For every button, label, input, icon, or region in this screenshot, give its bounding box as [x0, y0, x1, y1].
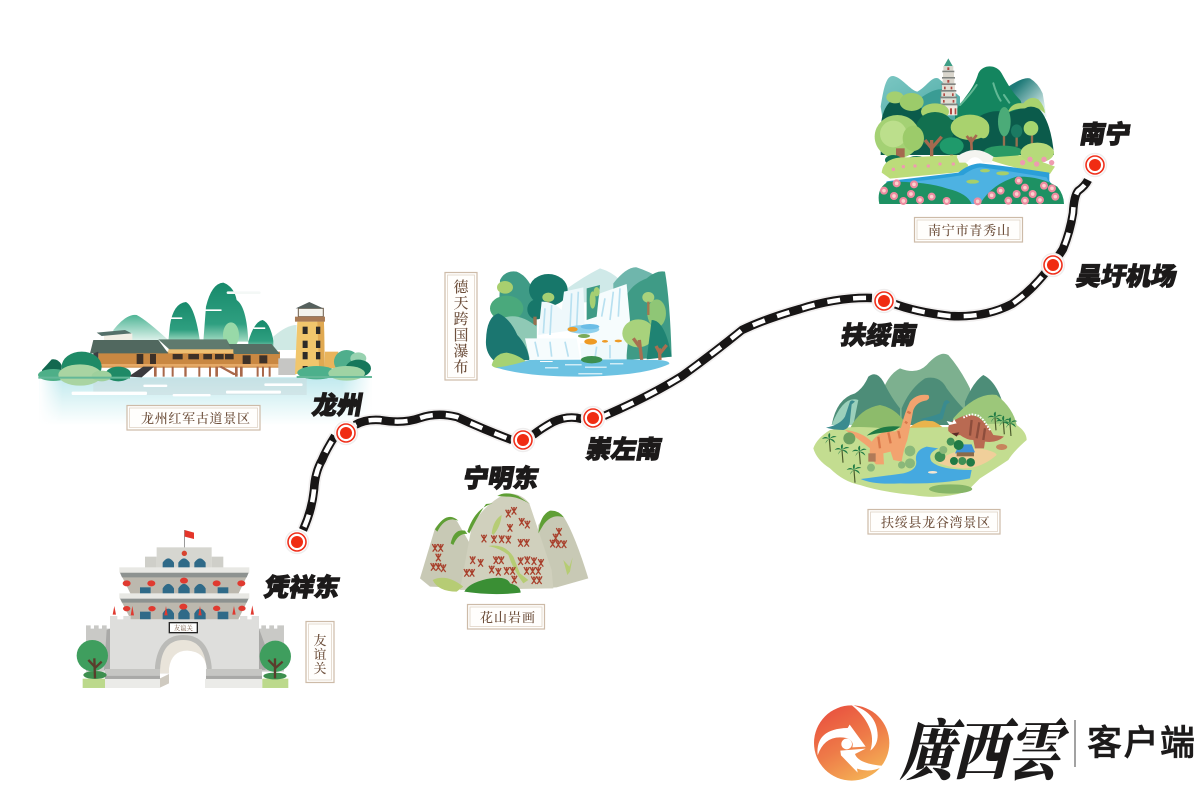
orange rocks [568, 327, 622, 345]
river [861, 447, 972, 484]
arch gate [155, 635, 212, 688]
petroglyph figures [431, 507, 567, 584]
left tree [77, 640, 108, 679]
third storey [119, 593, 249, 619]
caption: Friendship Pass vertical [306, 622, 334, 682]
illustration: Longgu Bay dinosaur park [813, 354, 1027, 497]
caption: Huashan rock paintings: 花山岩画 [480, 610, 535, 625]
back hills [498, 267, 672, 360]
label: Fusui South: 扶绥南 [839, 322, 919, 350]
left bush [492, 353, 528, 369]
ground island [813, 424, 1027, 497]
station labels [262, 120, 1179, 602]
label: Longzhou: 龙州 [310, 392, 365, 420]
caption: Detian waterfall vertical: 布 [453, 359, 469, 376]
white bridge [957, 150, 993, 163]
palm trees [822, 412, 1017, 483]
banks [882, 155, 968, 179]
label: Wuxu Airport: 吴圩机场 [1074, 263, 1179, 291]
illustration: Huashan rock paintings [420, 493, 588, 594]
boat [928, 471, 937, 474]
hut and camp [937, 444, 1007, 468]
illustration: Longzhou Red Army ancient road [38, 283, 372, 434]
caption: Detian waterfall vertical: 德 [453, 279, 469, 296]
caption: Huashan rock paintings [468, 604, 544, 629]
logo swirl emblem [814, 705, 889, 781]
caption: Nanning Qingxiu Mountain [914, 218, 1022, 242]
flag [184, 530, 194, 548]
watchtower [295, 302, 338, 374]
back hills [881, 76, 1047, 123]
illustration: Qingxiu Mountain [875, 58, 1064, 205]
caption: Longzhou Red Army road: 龙州红军古道景区 [141, 411, 250, 426]
second storey [119, 567, 249, 594]
illustration: Friendship Pass [77, 530, 291, 688]
green ridges [435, 493, 564, 545]
round trees [843, 432, 975, 472]
orange long-neck dinosaur [845, 395, 929, 464]
gray wall [278, 358, 296, 375]
bush behind orange dinosaur [867, 426, 900, 436]
green bush [464, 578, 521, 594]
station: Fusui South [872, 290, 896, 312]
caption: Fusui Longgu Bay [868, 510, 1000, 534]
plinth [83, 669, 288, 688]
plaque: 友谊关 [174, 623, 193, 632]
river [879, 163, 1064, 204]
label: Nanning: 南宁 [1078, 120, 1133, 149]
flower bushes [879, 177, 1064, 205]
caption: Detian waterfall vertical [445, 272, 477, 380]
waterfalls [525, 284, 630, 360]
station: Pingxiang East [286, 530, 308, 554]
caption: Friendship Pass vertical: 谊 [313, 647, 327, 662]
water [39, 377, 372, 434]
left dark tree [486, 313, 529, 362]
right tree [260, 641, 291, 679]
station: Wuxu Airport [1042, 254, 1064, 276]
caption: Detian waterfall vertical: 瀑 [453, 343, 469, 360]
caption: Detian waterfall vertical: 跨 [453, 311, 469, 328]
label: Ningming East: 宁明东 [461, 464, 541, 493]
meadow patch [929, 484, 972, 494]
logo calligraphy: 廣西雲 [896, 716, 1074, 788]
lime canopies [886, 91, 1045, 147]
caption: Nanning Qingxiu Mountain: 南宁市青秀山 [928, 223, 1010, 238]
station: Longzhou [334, 422, 358, 444]
caption: Friendship Pass vertical: 关 [313, 661, 327, 676]
main wall [110, 616, 259, 670]
karst mountains [832, 354, 1003, 425]
plaque [169, 623, 197, 633]
label: Pingxiang East: 凭祥东 [262, 573, 342, 602]
divider [1074, 720, 1076, 767]
pagoda [939, 58, 958, 115]
right trees [622, 292, 672, 360]
water highlights [540, 361, 623, 374]
cloud streaks [168, 291, 265, 329]
water highlights [72, 383, 303, 396]
right bushes [297, 350, 372, 381]
top storey [145, 547, 223, 569]
route line: Nanning to Pingxiang East [303, 180, 1088, 530]
side towers [86, 625, 284, 672]
rock peaks [420, 494, 588, 590]
trees [875, 107, 1038, 166]
dark forest [881, 97, 1054, 155]
stilted wooden houses [90, 339, 280, 377]
left bushes [38, 352, 131, 386]
mountains [113, 283, 297, 350]
lotus leaves [929, 169, 1009, 192]
background blue dinosaurs [826, 400, 950, 430]
station markers [286, 154, 1106, 554]
misty slope [498, 316, 537, 360]
river bush [581, 356, 602, 363]
red lanterns [113, 578, 254, 615]
illustration: Detian waterfall [486, 267, 672, 377]
station: Ningming East [512, 428, 534, 452]
caption: Fusui Longgu Bay: 扶绥县龙谷湾景区 [881, 515, 990, 530]
caption: Friendship Pass vertical: 友 [313, 633, 327, 648]
logo: Guangxi Cloud client [814, 705, 1195, 788]
right bank flowers [892, 157, 1054, 171]
label: Chongzuo South: 崇左南 [584, 436, 664, 464]
upper small house [97, 330, 132, 342]
client text: 客户端 [1087, 724, 1195, 763]
pool [496, 359, 669, 377]
stegosaur dinosaur [947, 414, 1004, 448]
forest trees [490, 274, 568, 325]
building reflection [93, 378, 307, 395]
caption: Longzhou Red Army road [127, 406, 260, 430]
green hills [850, 395, 1017, 445]
station: Nanning [1084, 154, 1106, 176]
main mountain [955, 66, 1028, 127]
station: Chongzuo South [582, 406, 604, 430]
moss patches [433, 515, 573, 592]
caption: Detian waterfall vertical: 天 [453, 295, 469, 312]
caption: Detian waterfall vertical: 国 [453, 327, 469, 344]
